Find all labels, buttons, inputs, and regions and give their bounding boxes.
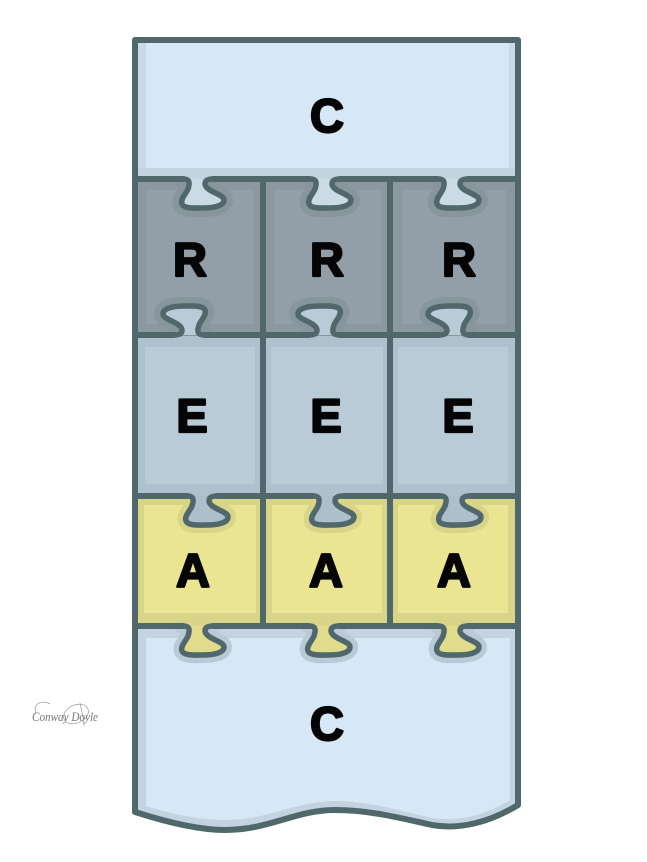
panel: bottom C block bbox=[135, 627, 518, 830]
row letters: E: E bbox=[310, 389, 342, 442]
row letters: R: R bbox=[310, 233, 344, 286]
jigsaw tabs: E down into A bbox=[186, 496, 481, 525]
signature: Conway Doyle bbox=[32, 709, 98, 724]
row letters: E: E bbox=[442, 389, 474, 442]
heading letter: bottom C: C bbox=[310, 697, 344, 750]
grid lines and outer outline bbox=[135, 40, 518, 830]
row letters: E bbox=[176, 389, 474, 442]
row letters: A: A bbox=[309, 544, 343, 597]
jigsaw tabs: top C into R bbox=[182, 179, 479, 208]
panel: E row bbox=[135, 336, 518, 496]
row letters: A: A bbox=[437, 544, 471, 597]
row letters: A: A bbox=[176, 544, 210, 597]
panel: R row bbox=[135, 179, 518, 336]
heading letter: top C: C bbox=[310, 89, 344, 142]
jigsaw tabs: A down into bottom C bbox=[182, 626, 479, 655]
signature bbox=[32, 700, 98, 728]
row letters: E: E bbox=[176, 389, 208, 442]
panel: A row bbox=[135, 496, 518, 627]
row letters: R bbox=[173, 233, 476, 286]
jigsaw tabs: E up into R bbox=[163, 306, 470, 335]
row letters: A bbox=[176, 544, 471, 597]
panel: top C block bbox=[135, 40, 518, 180]
row letters: R: R bbox=[442, 233, 476, 286]
row letters: R: R bbox=[173, 233, 207, 286]
